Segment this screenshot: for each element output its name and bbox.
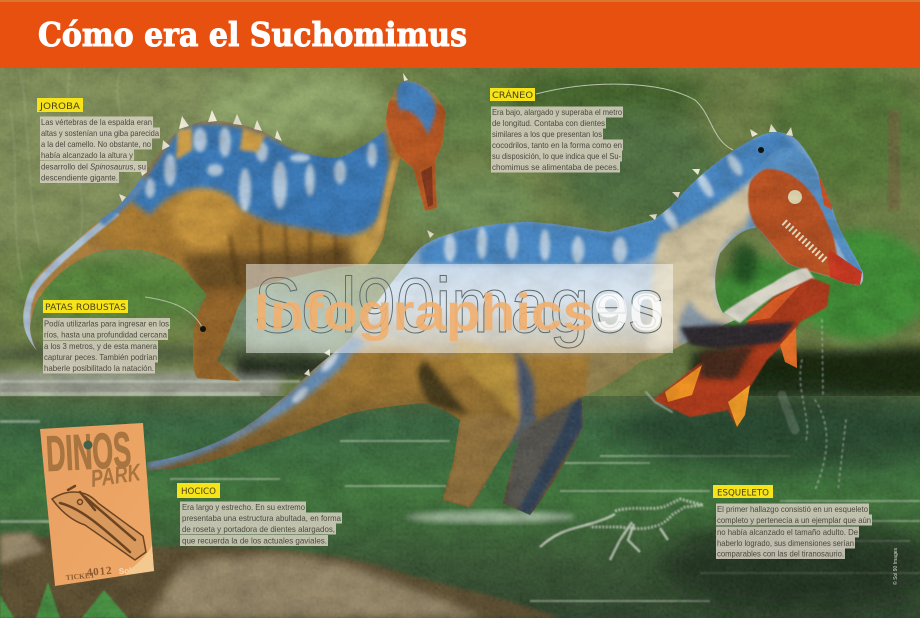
callout: patas robustas: a los 3 metros, y de esta manera bbox=[44, 341, 157, 351]
callout: cráneo: similares a los que presentan los bbox=[492, 129, 602, 139]
callout: hocico: de roseta y portadora de dientes alargados, bbox=[182, 524, 335, 534]
ticket heading: DINOS bbox=[45, 422, 132, 482]
callout: cráneo: cocodrilos, tanto en la forma como en bbox=[492, 140, 622, 150]
watermark white number: 90 bbox=[594, 284, 664, 342]
ticket: Dinos Park: 4012 bbox=[86, 565, 113, 579]
credit: © Sol 90 Images bbox=[892, 547, 899, 585]
callout: hocico: que recuerda la de los actuales gaviales. bbox=[182, 536, 327, 546]
illustration: fish caught in the jaws bbox=[646, 268, 846, 490]
callout: patas robustas: capturar peces. También podrían bbox=[44, 352, 157, 362]
illustration: Suchomimus in the river bbox=[140, 120, 880, 530]
callout: joroba: desarrollo del Spinosaurus, su bbox=[41, 162, 146, 172]
callout: cráneo: Era bajo, alargado y superaba el metro bbox=[492, 107, 622, 117]
callout: patas robustas: PATAS ROBUSTAS bbox=[45, 303, 126, 313]
pointer line: patas bbox=[145, 297, 202, 327]
pointer marker: patas bbox=[200, 326, 206, 332]
callout: joroba: descendiente gigante. bbox=[41, 172, 118, 182]
callout: cráneo: su disposición, lo que indica que el Su- bbox=[492, 151, 621, 161]
callout: cráneo: de longitud. Contaba con dientes bbox=[492, 118, 605, 128]
callout: joroba: altas y sostenían una giba parecida bbox=[41, 128, 159, 138]
callout: esqueleto: El primer hallazgo consistió en un esqueleto bbox=[717, 504, 868, 514]
callout: joroba: había alcanzado la altura y bbox=[41, 150, 134, 160]
callout: hocico: Era largo y estrecho. En su extremo bbox=[182, 502, 305, 512]
ticket logo: Sol90 bbox=[119, 565, 141, 576]
legs bbox=[442, 415, 525, 508]
callout: joroba: a la del camello. No obstante, no bbox=[41, 139, 151, 149]
callout: hocico: presentaba una estructura abultada, en forma bbox=[182, 513, 341, 523]
water bbox=[0, 380, 920, 618]
callout: patas robustas: Podía utilizarlas para ingresar en los bbox=[44, 318, 169, 328]
watermark outline text: Sol90images bbox=[254, 261, 664, 349]
ticket corner fold bbox=[125, 545, 154, 575]
head colouring bbox=[748, 165, 840, 277]
pointer line: cráneo bbox=[536, 84, 733, 150]
pointer marker: cráneo bbox=[758, 147, 764, 153]
callout: cráneo: CRÁNEO bbox=[492, 89, 533, 101]
callout: cráneo bbox=[490, 88, 623, 172]
watermark orange text: Infographics bbox=[254, 284, 594, 342]
ticket: Dinos Park bbox=[40, 422, 154, 586]
callout: esqueleto: haberlo logrado, sus dimensiones serían bbox=[717, 538, 854, 548]
callout: esqueleto: completo y pertenecía a un ejemplar que aún bbox=[717, 515, 871, 525]
callout: joroba: Las vértebras de la espalda eran bbox=[41, 117, 152, 127]
callout: joroba: JOROBA bbox=[39, 102, 81, 112]
illustration: Suchomimus standing behind bbox=[22, 73, 445, 381]
ticket subheading: PARK bbox=[89, 459, 144, 493]
callout: hocico bbox=[177, 483, 342, 546]
callout: esqueleto: comparables con las del tiranosaurio. bbox=[717, 548, 844, 558]
watermark bbox=[246, 261, 673, 353]
illustration: skeleton bbox=[540, 499, 703, 560]
callout: joroba bbox=[37, 98, 160, 183]
title: Cómo era el Suchomimus bbox=[38, 15, 467, 54]
title bar bbox=[0, 0, 920, 68]
water splash bbox=[646, 320, 846, 490]
callout: esqueleto bbox=[713, 485, 872, 559]
callout: patas robustas: ríos, hasta una profundidad cercana bbox=[44, 330, 167, 340]
callout: esqueleto: ESQUELETO bbox=[717, 488, 769, 498]
callout: hocico: HOCICO bbox=[181, 487, 216, 497]
callout: cráneo: chomimus se alimentaba de peces. bbox=[492, 162, 619, 172]
head colouring bbox=[386, 100, 447, 211]
callout: patas robustas bbox=[43, 300, 170, 374]
callout: esqueleto: no había alcanzado el tamaño adulto. De bbox=[717, 527, 858, 537]
icon: spinosaur skull sketch bbox=[52, 486, 146, 560]
callout: patas robustas: haberle posibilitado la natación. bbox=[44, 363, 154, 373]
rock in foreground bbox=[0, 534, 560, 618]
foam at the feet bbox=[405, 511, 575, 523]
ticket number: TICKET bbox=[65, 570, 95, 582]
ticket hole bbox=[84, 440, 92, 450]
